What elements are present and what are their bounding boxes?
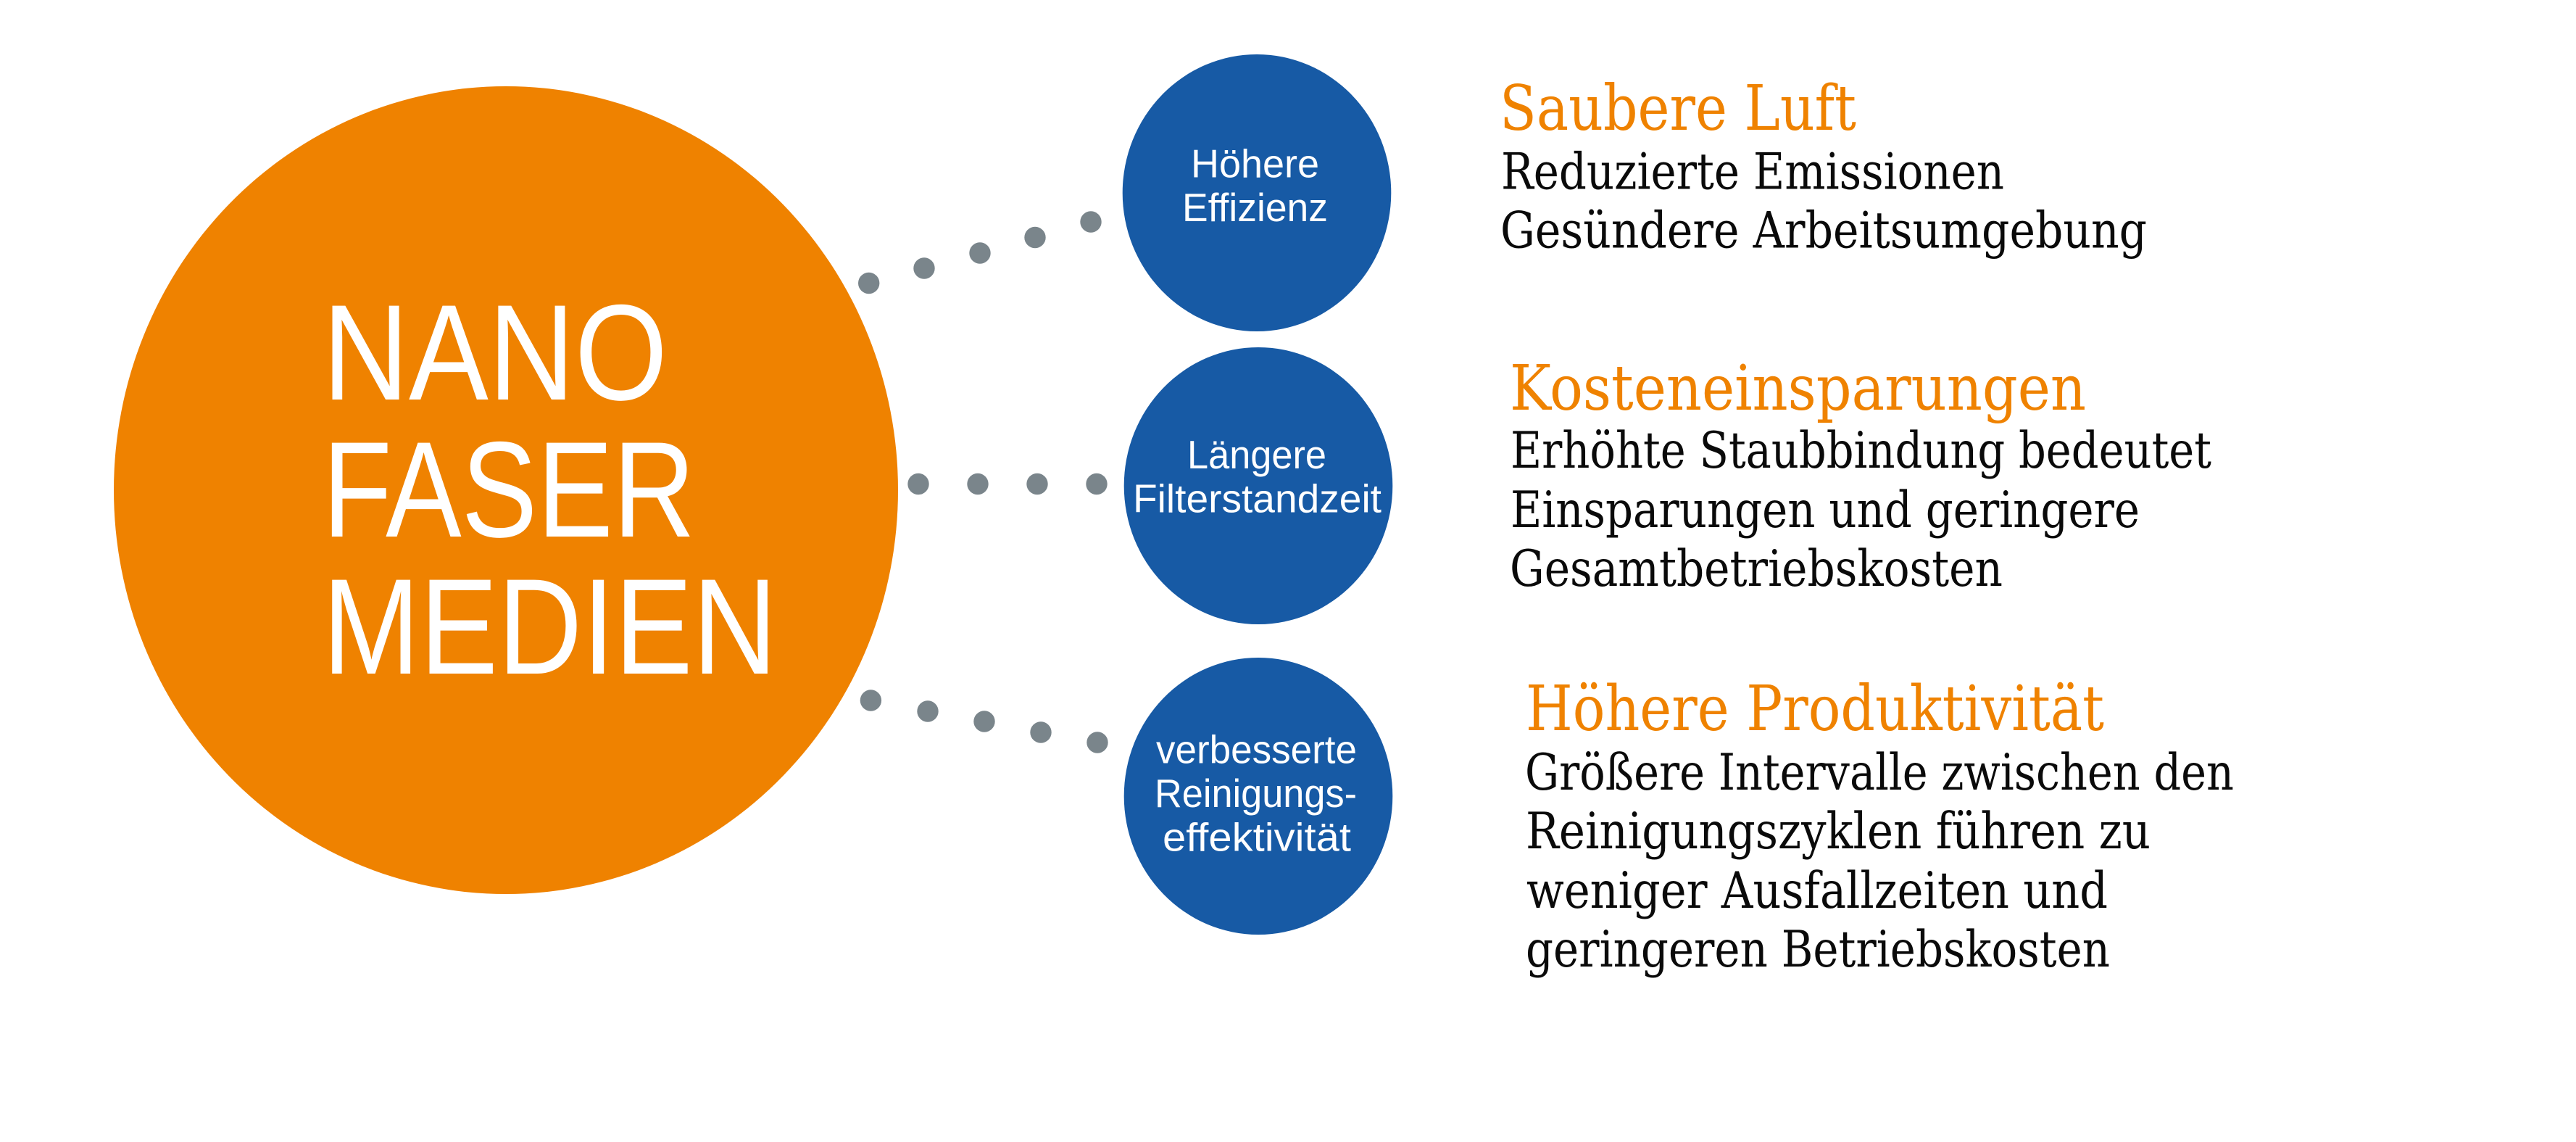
text block: Saubere Luft (1500, 73, 2147, 260)
central title: MEDIEN (323, 550, 777, 703)
body: Saubere Luft: Gesündere Arbeitsumgebung (1500, 202, 2147, 260)
blue circle: Längere Filterstandzeit: Filterstandzeit (1133, 476, 1382, 521)
blue circle: Höhere Effizienz: Höhere (1191, 141, 1319, 186)
heading: Höhere Produktivität: Höhere Produktivität (1526, 673, 2104, 745)
body: Kosteneinsparungen: Gesamtbetriebskosten (1510, 540, 2003, 598)
text block: Höhere Produktivität (1525, 673, 2234, 979)
central orange circle: Nano Faser Medien (114, 86, 898, 894)
body: Kosteneinsparungen (1510, 422, 2211, 598)
central title (323, 276, 777, 703)
text block: Kosteneinsparungen (1510, 352, 2211, 598)
dotted connector: bottom (860, 690, 1108, 753)
body: Saubere Luft: Reduzierte Emissionen (1501, 144, 2004, 202)
dotted connector: middle (907, 473, 1108, 495)
body: Saubere Luft (1500, 144, 2147, 260)
blue circle: Längere Filterstandzeit: Längere (1187, 432, 1326, 477)
heading: Kosteneinsparungen: Kosteneinsparungen (1510, 352, 2086, 425)
body: Höhere Produktivität: geringeren Betriebskosten (1526, 921, 2110, 979)
central title: FASER (323, 413, 695, 566)
blue circle: verbesserte Reinigungseffektivität: Reinigungs- (1155, 771, 1357, 816)
blue circle: Längere Filterstandzeit (1124, 347, 1392, 624)
blue circle: verbesserte Reinigungseffektivität: effektivität (1163, 815, 1351, 860)
body: Höhere Produktivität: Reinigungszyklen führen zu (1526, 803, 2151, 861)
dotted connector: top (858, 211, 1102, 294)
blue circle: verbesserte Reinigungseffektivität: verbesserte (1156, 727, 1357, 771)
heading: Saubere Luft: Saubere Luft (1500, 73, 1856, 145)
body: Kosteneinsparungen: Einsparungen und geringere (1511, 481, 2140, 539)
central title: NANO (323, 276, 668, 429)
body: Höhere Produktivität: Größere Intervalle zwischen den (1525, 744, 2234, 802)
blue circle: Höhere Effizienz (1123, 54, 1391, 331)
body: Kosteneinsparungen: Erhöhte Staubbindung bedeutet (1511, 422, 2211, 480)
body: Höhere Produktivität (1525, 744, 2234, 979)
blue circle: Höhere Effizienz: Effizienz (1182, 185, 1328, 230)
blue circle: verbesserte Reinigungseffektivität (1124, 658, 1392, 935)
body: Höhere Produktivität: weniger Ausfallzeiten und (1526, 862, 2108, 920)
